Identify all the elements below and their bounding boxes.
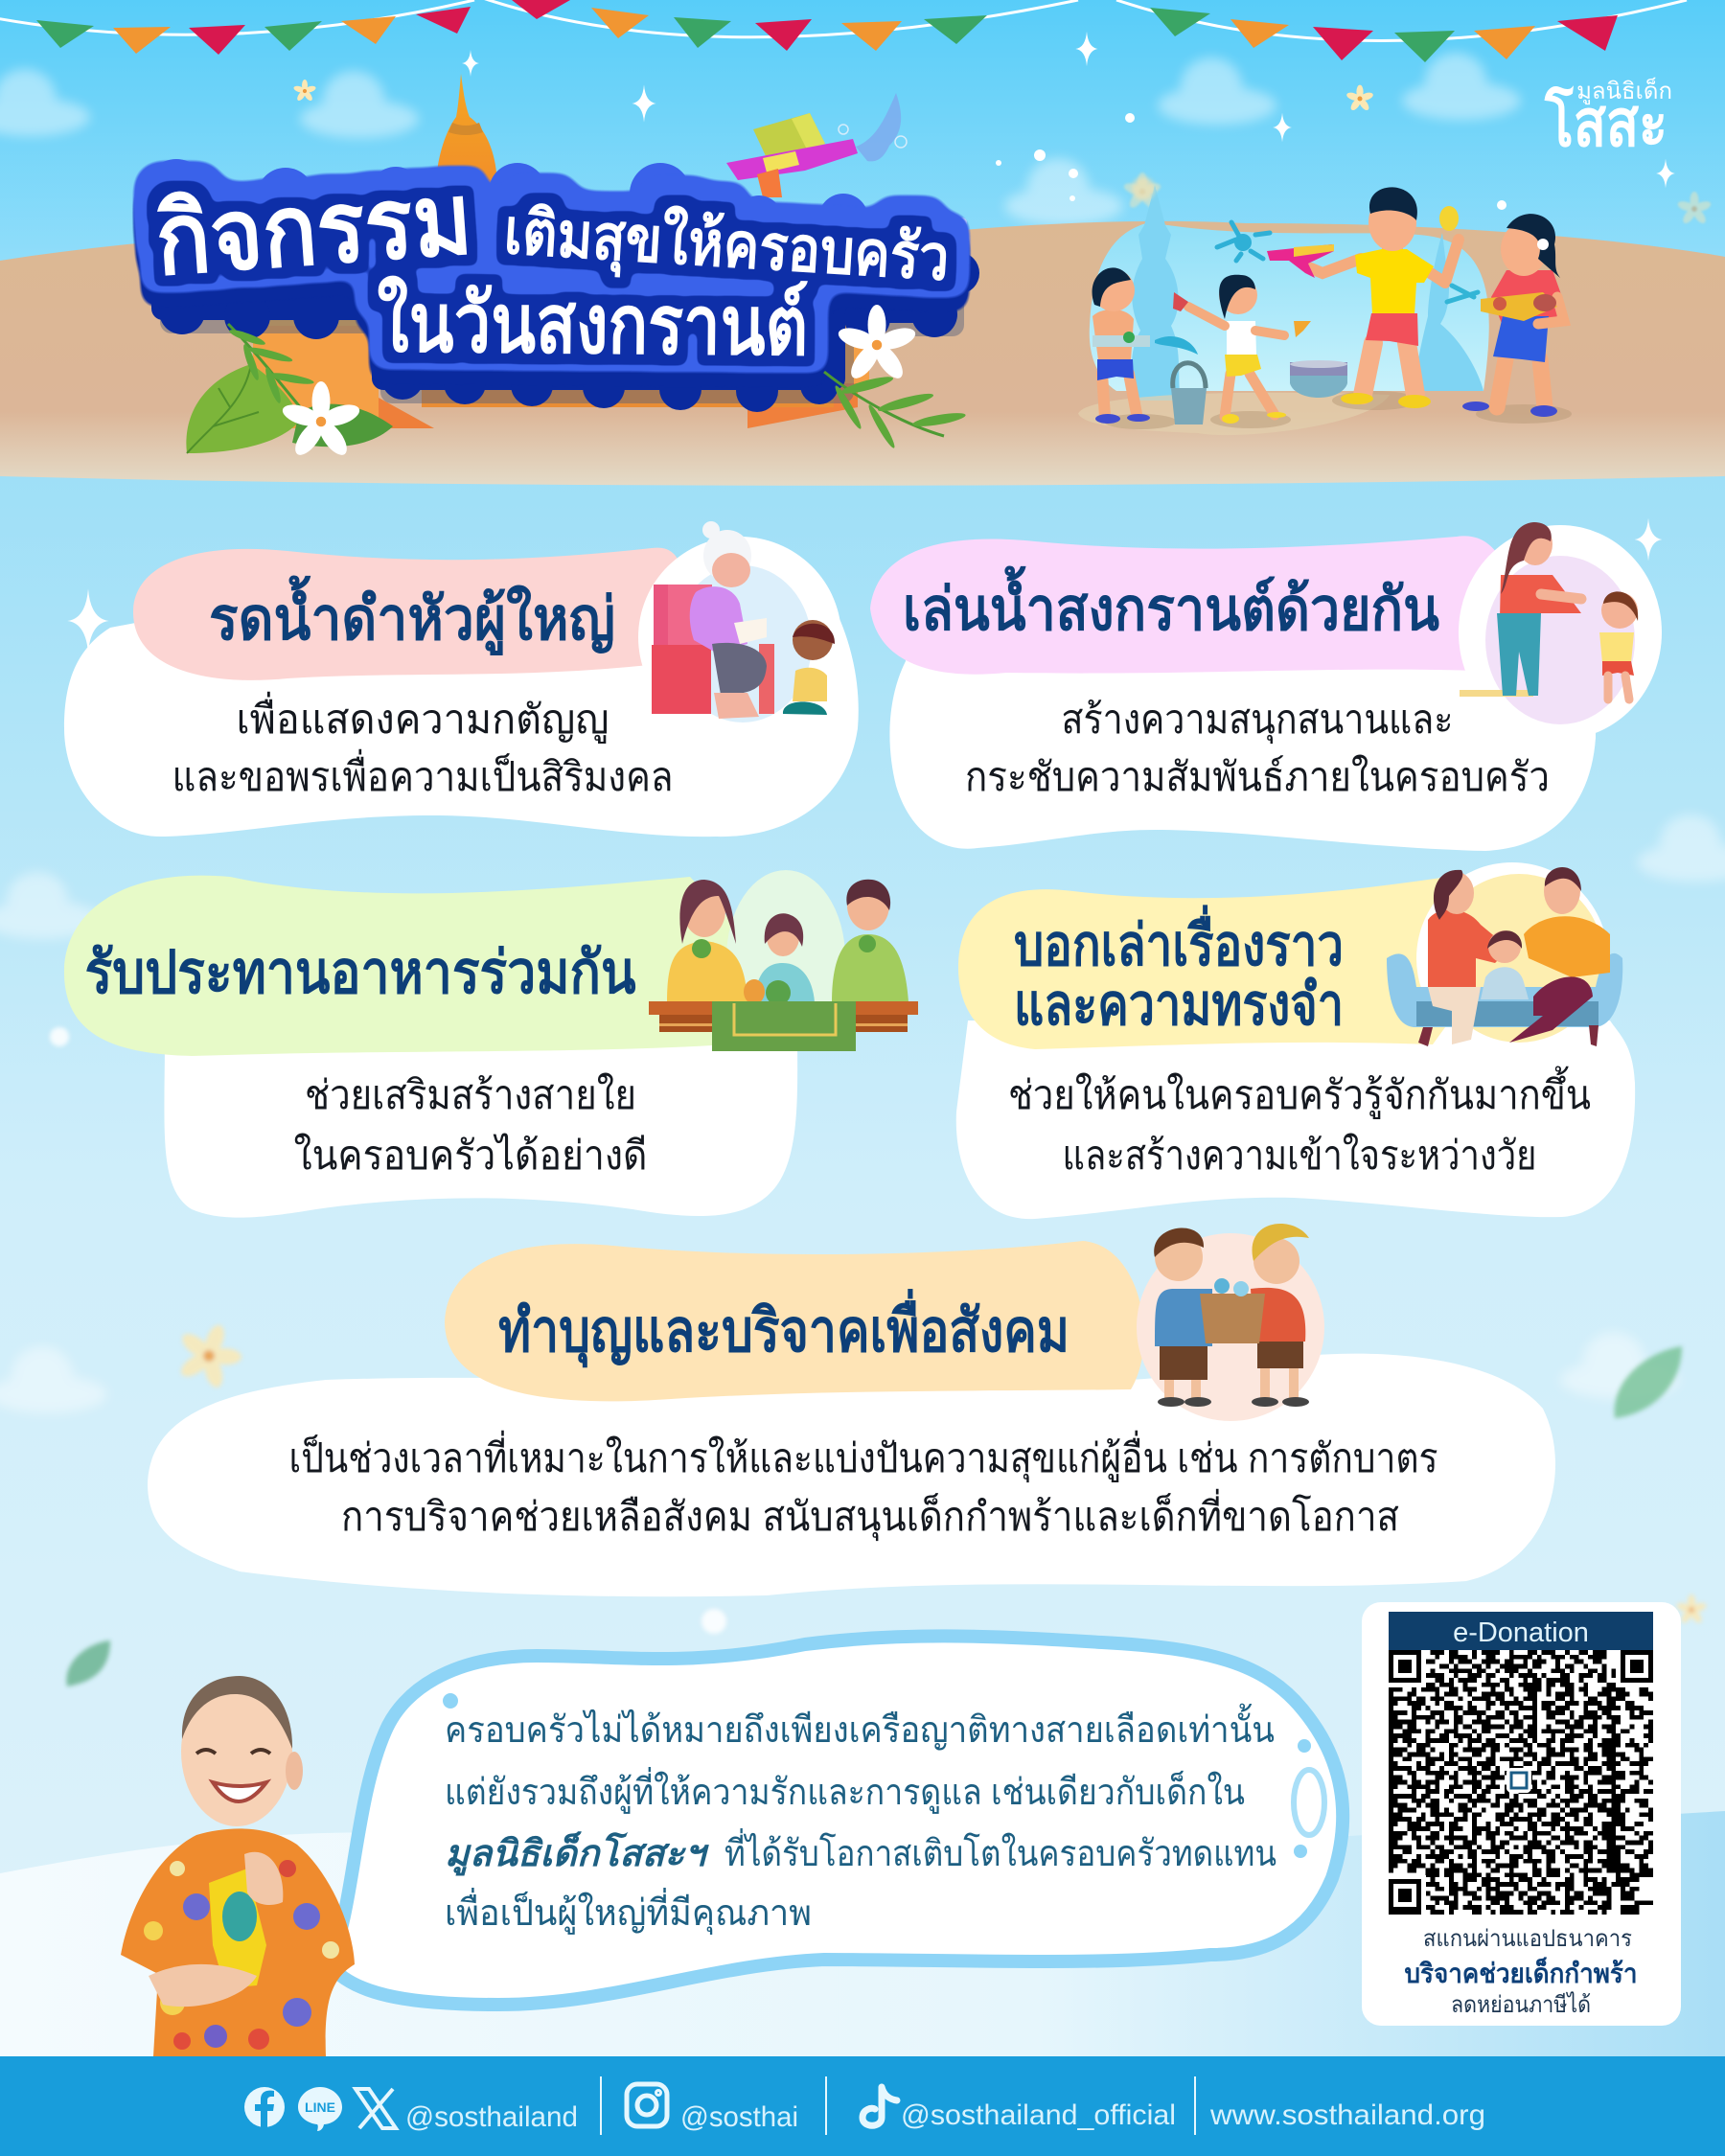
QR caption: บริจาคช่วยเด็กกำพร้า xyxy=(1405,1957,1637,1988)
message text: แต่ยังรวมถึงผู้ที่ให้ความรักและการดูแล เช่นเดียวกับเด็กใน xyxy=(445,1767,1245,1814)
illustration xyxy=(649,870,918,1051)
illustration xyxy=(1137,1224,1324,1421)
message text: มูลนิธิเด็กโสสะฯ xyxy=(445,1831,710,1876)
message text: เพื่อเป็นผู้ใหญ่ที่มีคุณภาพ xyxy=(445,1888,812,1935)
body: และขอพรเพื่อความเป็นสิริมงคล xyxy=(172,749,673,799)
title xyxy=(152,164,952,373)
e-Donation header xyxy=(1389,1612,1653,1650)
decorative clouds xyxy=(0,53,1725,1413)
footer bar xyxy=(0,2056,1725,2156)
temple behind title xyxy=(253,74,869,428)
handle: @sosthai xyxy=(680,2101,798,2133)
decorative petals and leaves xyxy=(50,1027,1707,1686)
heading pill xyxy=(870,536,1505,675)
message text: ที่ได้รับโอกาสเติบโตในครอบครัวทดแทน xyxy=(724,1828,1276,1874)
QR donation card xyxy=(1362,1602,1681,2026)
e-Donation header: e-Donation xyxy=(1453,1617,1589,1648)
heading pill xyxy=(133,548,680,680)
boy with water toy photo xyxy=(121,1676,355,2056)
boy with water gun xyxy=(1092,267,1198,424)
heading pill xyxy=(958,877,1495,1049)
handle: @sosthailand xyxy=(405,2101,578,2133)
body xyxy=(289,1431,1438,1542)
card body xyxy=(148,1354,1555,1596)
icon: line xyxy=(298,2087,342,2131)
body: การบริจาคช่วยเหลือสังคม สนับสนุนเด็กกำพร้าและเด็กที่ขาดโอกาส xyxy=(341,1489,1399,1542)
icon: line: LINE xyxy=(305,2099,335,2115)
message text: ครอบครัวไม่ได้หมายถึงเพียงเครือญาติทางสายเลือดเท่านั้น xyxy=(445,1703,1275,1751)
QR caption: ลดหย่อนภาษีได้ xyxy=(1451,1991,1591,2018)
sand ground xyxy=(0,221,1725,486)
heading: รับประทานอาหารร่วมกัน xyxy=(84,940,636,1006)
logo: มูลนิธิเด็ก xyxy=(1576,77,1672,105)
QR caption: สแกนผ่านแอปธนาคาร xyxy=(1423,1926,1632,1952)
panel: merit and donation xyxy=(148,1224,1555,1596)
heading pill xyxy=(445,1241,1144,1401)
QR caption xyxy=(1405,1926,1637,2018)
heading pill xyxy=(64,876,767,1056)
illustration xyxy=(1387,862,1622,1054)
message text xyxy=(445,1703,1276,1935)
water gun toy xyxy=(726,93,907,197)
body: สร้างความสนุกสนานและ xyxy=(1062,697,1453,745)
girl xyxy=(1173,275,1311,424)
card body xyxy=(889,623,1596,851)
panel: play water together xyxy=(870,522,1662,851)
card body xyxy=(64,575,859,837)
icon: facebook xyxy=(244,2087,285,2127)
card body xyxy=(956,1021,1635,1219)
card body xyxy=(164,1035,797,1218)
leaves and flowers around title xyxy=(186,305,966,460)
logo: โสสะ xyxy=(1544,85,1668,160)
body: และสร้างความเข้าใจระหว่างวัย xyxy=(1062,1133,1537,1178)
heading: บอกเล่าเรื่องราว xyxy=(1014,905,1344,977)
body xyxy=(172,692,673,799)
title scalloped backing xyxy=(142,159,979,412)
quote bubble xyxy=(330,1636,1343,2005)
bunting flags xyxy=(0,0,1687,62)
title: ในวันสงกรานต์ xyxy=(377,276,809,373)
sparkles and small flowers xyxy=(67,32,1713,654)
icon: instagram xyxy=(627,2084,667,2126)
body: ช่วยเสริมสร้างสายใย xyxy=(305,1072,636,1117)
QR code xyxy=(1389,1652,1653,1912)
woman xyxy=(1447,214,1564,417)
title: เติมสุขให้ครอบครัว xyxy=(502,194,952,298)
body xyxy=(293,1072,648,1178)
heading: และความทรงจำ xyxy=(1014,973,1344,1037)
heading: รดน้ำดำหัวผู้ใหญ่ xyxy=(209,575,615,655)
body: เป็นช่วงเวลาที่เหมาะในการให้และแบ่งปันความสุขแก่ผู้อื่น เช่น การตักบาตร xyxy=(289,1431,1438,1483)
heading xyxy=(1014,905,1344,1037)
panel: eat together xyxy=(64,870,918,1218)
handle: @sosthailand_official xyxy=(901,2099,1176,2131)
website: www.sosthailand.org xyxy=(1209,2099,1485,2131)
body: กระชับความสัมพันธ์ภายในครอบครัว xyxy=(965,754,1550,799)
title: กิจกรรม xyxy=(152,164,475,296)
icon: x xyxy=(356,2089,396,2128)
man xyxy=(1267,187,1459,408)
bucket and bowl xyxy=(1171,360,1347,424)
heading: ทำบุญและบริจาคเพื่อสังคม xyxy=(498,1289,1070,1367)
body xyxy=(965,697,1550,799)
body: ในครอบครัวได้อย่างดี xyxy=(293,1133,648,1178)
QR finder patterns xyxy=(1389,1650,1653,1912)
illustration circle xyxy=(638,521,841,738)
icon: tiktok xyxy=(862,2087,897,2125)
panel: tell stories xyxy=(956,862,1635,1219)
body: ช่วยให้คนในครอบครัวรู้จักกันมากขึ้น xyxy=(1008,1066,1591,1119)
illustration circle xyxy=(1459,522,1662,740)
heading: เล่นน้ำสงกรานต์ด้วยกัน xyxy=(903,565,1439,643)
panel: pour water on elders xyxy=(64,521,859,837)
body: เพื่อแสดงความกตัญญู xyxy=(236,692,610,744)
body xyxy=(1008,1066,1591,1178)
family playing water illustration xyxy=(1078,177,1572,435)
